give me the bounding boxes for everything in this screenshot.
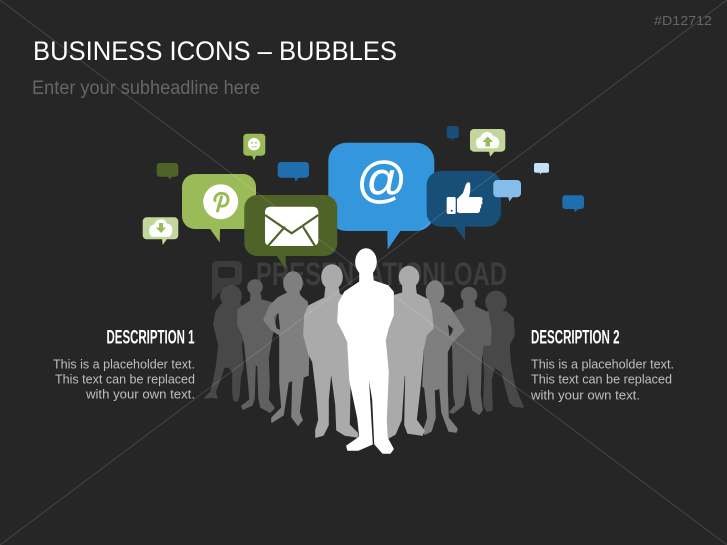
subheadline: Enter your subheadline here (32, 78, 260, 99)
silhouette: far left woman (205, 286, 245, 401)
description 1 text (53, 356, 195, 401)
bubble: pinterest (182, 174, 256, 242)
bubble: blue small left (278, 162, 309, 182)
description 2 text (530, 356, 674, 402)
description 2 text: This is a placeholder text. (531, 356, 674, 371)
bubble: mail (244, 195, 337, 268)
description 1 block (53, 326, 195, 401)
bubble: cloud upload (470, 129, 505, 157)
bubble: dark green small (157, 163, 178, 180)
description 2 block (530, 326, 674, 402)
description 1 text: This is a placeholder text. (53, 356, 195, 371)
description 1 text: This text can be replaced (55, 371, 195, 386)
bubble: pale blue tiny (534, 163, 549, 174)
document id: #D12712 (654, 13, 712, 28)
title: BUSINESS ICONS – BUBBLES (33, 36, 397, 66)
silhouette: third left woman (264, 272, 309, 425)
bubble: at sign: @ (356, 152, 407, 208)
bubble: smiley (243, 134, 265, 160)
speech bubbles cluster (143, 126, 584, 268)
silhouette: inner left man (304, 265, 358, 437)
bubble: cloud download (143, 217, 178, 245)
silhouette: second left man (238, 280, 276, 412)
description 2 text: This text can be replaced (531, 371, 672, 386)
bubble: blue small right (562, 195, 584, 212)
silhouette: far right woman (482, 292, 523, 411)
crowd of business people silhouettes (205, 249, 523, 453)
description 2 heading: DESCRIPTION 2 (531, 326, 620, 348)
description 2 text: with your own text. (530, 388, 640, 402)
silhouette: inner right man (380, 266, 433, 438)
silhouette: second right man (450, 288, 491, 414)
bubble: at sign (328, 143, 434, 250)
watermark: PresentationLoad logo and wordmark (212, 256, 507, 300)
bubble: light blue (493, 180, 521, 202)
bubble: thumbs up (427, 171, 501, 240)
description 1 text: with your own text. (85, 386, 195, 401)
silhouette: central white man (338, 249, 393, 453)
description 1 heading: DESCRIPTION 1 (106, 326, 195, 348)
silhouette: third right woman (423, 281, 464, 434)
watermark: PresentationLoad logo and wordmark: PRESENTATIONLOAD (256, 256, 507, 292)
bubble: dark blue tiny (447, 126, 459, 141)
